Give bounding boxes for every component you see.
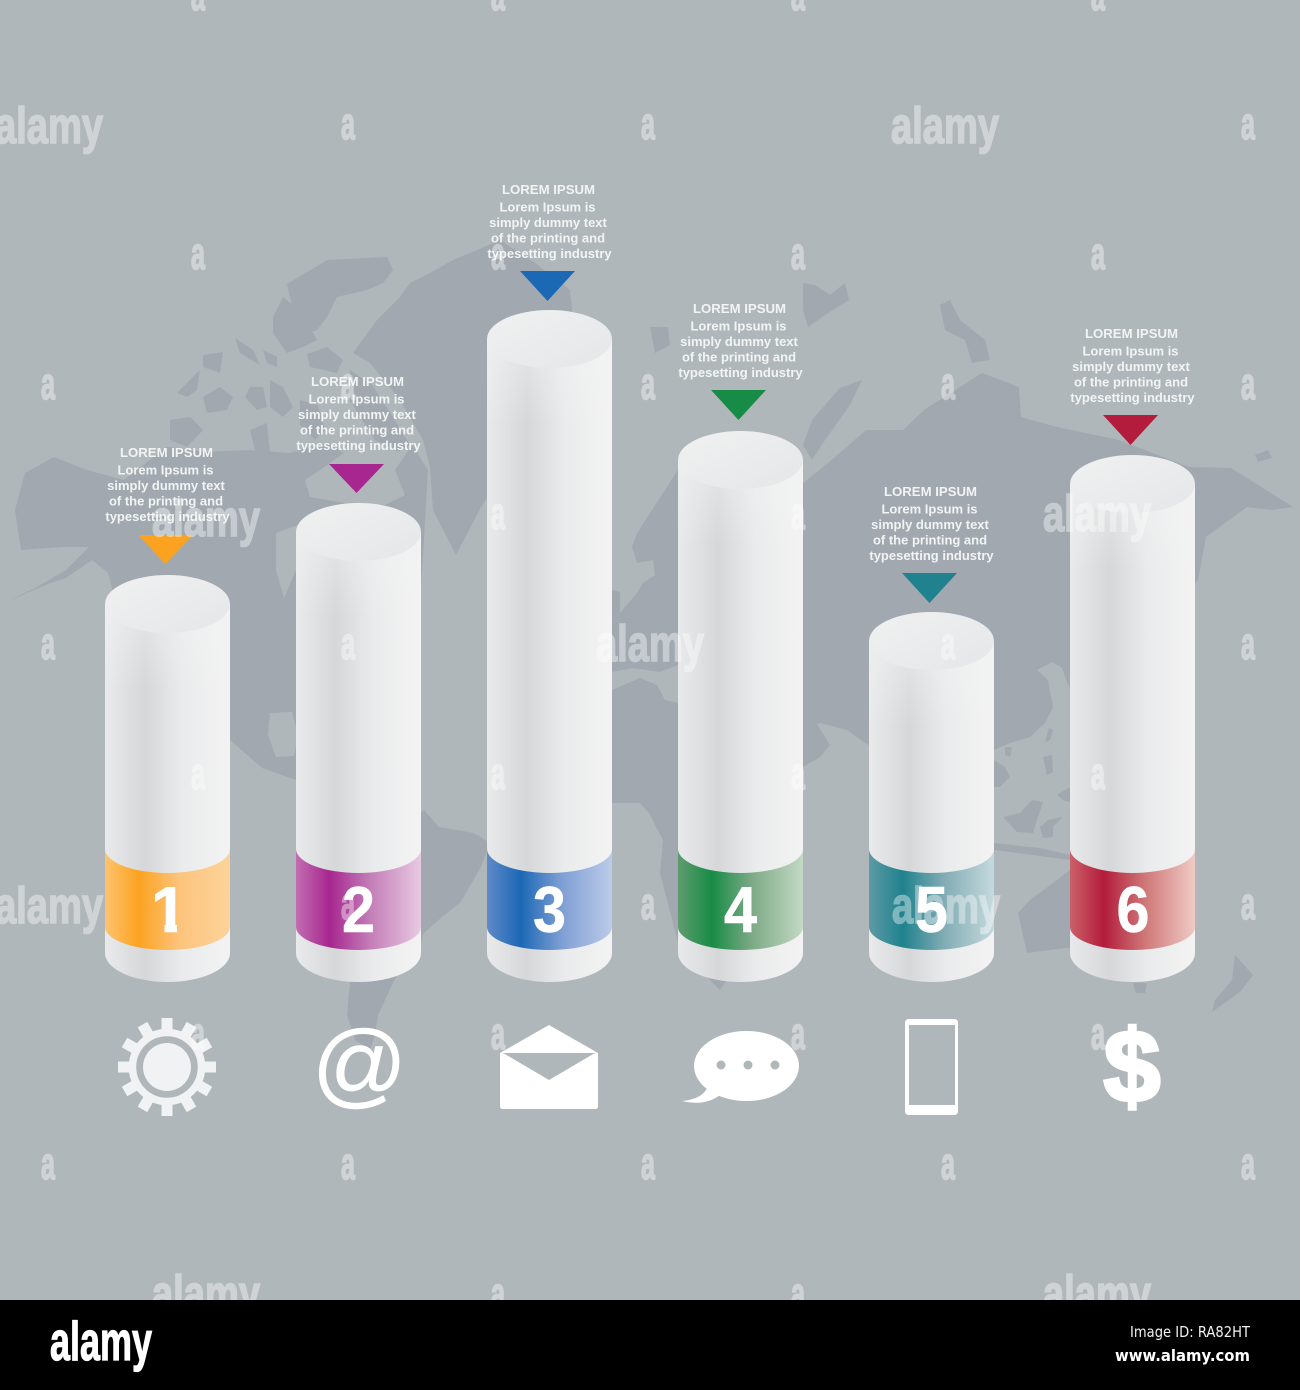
watermark pattern: a (341, 1138, 356, 1189)
watermark pattern: a (491, 488, 506, 539)
number 4: 4 (724, 873, 757, 946)
marker triangle 5 (902, 573, 957, 603)
text block 4: typesetting industry (678, 365, 803, 380)
text block 1 (105, 445, 230, 524)
watermark pattern: a (641, 98, 656, 149)
watermark pattern: a (1241, 878, 1256, 929)
watermark pattern: a (341, 878, 356, 929)
website: www.alamy.com (1115, 1346, 1250, 1365)
watermark pattern: a (641, 1138, 656, 1189)
text block 2: typesetting industry (296, 438, 421, 453)
icon: at sign: @ (310, 1011, 406, 1116)
watermark pattern: a (1091, 228, 1106, 279)
text block 1: simply dummy text (107, 478, 226, 493)
watermark pattern: a (191, 228, 206, 279)
text block 5: LOREM IPSUM (884, 484, 977, 499)
watermark pattern: a (641, 358, 656, 409)
watermark pattern: a (791, 1268, 806, 1319)
text block 5: simply dummy text (871, 517, 990, 532)
watermark pattern: a (791, 488, 806, 539)
text block 6: typesetting industry (1070, 390, 1195, 405)
watermark pattern: a (941, 1138, 956, 1189)
marker triangle 1 (138, 535, 193, 564)
text block 6: of the printing and (1074, 374, 1188, 390)
number 1: 1 (151, 873, 187, 946)
world map silhouette (6, 240, 1293, 1050)
icon: dollar sign: $ (1104, 1010, 1160, 1124)
watermark pattern: a (41, 358, 56, 409)
cylinder 2 colour band (296, 849, 421, 950)
watermark pattern: alamy (1043, 485, 1151, 542)
text block 2 (296, 374, 421, 453)
watermark pattern: alamy (152, 1265, 260, 1322)
cylinder 3 top (487, 310, 612, 368)
cylinder 6 top (1070, 455, 1195, 513)
text block 2: Lorem Ipsum is (308, 392, 405, 406)
text block 6: LOREM IPSUM (1085, 326, 1178, 341)
panel: cylinder 5 (869, 612, 994, 982)
cylinder 5 colour band (869, 849, 994, 950)
cylinder 3 colour band (487, 849, 612, 950)
text block 6: simply dummy text (1072, 359, 1191, 374)
text block 3: LOREM IPSUM (502, 182, 595, 197)
cylinder 2 top (296, 503, 421, 561)
text block 1: typesetting industry (105, 509, 230, 524)
marker triangle 3 (520, 271, 575, 301)
watermark pattern: a (191, 748, 206, 799)
watermark pattern: a (341, 98, 356, 149)
number 3: 3 (533, 873, 566, 946)
marker triangle 2 (329, 464, 384, 493)
text block 6: Lorem Ipsum is (1082, 344, 1179, 358)
watermark pattern: a (491, 1008, 506, 1059)
watermark pattern: a (341, 358, 356, 409)
text block 1: Lorem Ipsum is (117, 462, 214, 478)
text block 1: LOREM IPSUM (120, 445, 213, 460)
marker triangle 4 (711, 390, 766, 420)
panel: cylinder 6 (1070, 455, 1195, 982)
text block 1: of the printing and (109, 494, 223, 508)
watermark pattern: a (1091, 748, 1106, 799)
text block 4: of the printing and (682, 350, 796, 364)
cylinder 1 colour band (105, 849, 230, 950)
footer bar (0, 1300, 1300, 1390)
text block 5: typesetting industry (869, 548, 994, 563)
text block 3: typesetting industry (487, 246, 612, 261)
watermark pattern: alamy (1043, 1265, 1151, 1322)
cylinder 5 top (869, 612, 994, 670)
text block 4: Lorem Ipsum is (690, 318, 787, 334)
watermark pattern: alamy (596, 615, 704, 672)
panel: cylinder 3 (487, 310, 612, 982)
icon: gear (118, 1018, 216, 1116)
text block 3: Lorem Ipsum is (499, 200, 596, 214)
number 5: 5 (915, 873, 948, 946)
text block 2: LOREM IPSUM (311, 374, 404, 389)
text block 3: of the printing and (491, 230, 605, 246)
watermark pattern: a (941, 358, 956, 409)
watermark pattern: a (491, 748, 506, 799)
icon: smartphone (905, 1019, 958, 1115)
watermark pattern: alamy (152, 490, 260, 547)
panel: cylinder 2 (296, 503, 421, 982)
watermark pattern: a (1241, 358, 1256, 409)
cylinder 4 top (678, 431, 803, 489)
image id: Image ID: RA82HT (1130, 1323, 1251, 1341)
text block 5 (869, 484, 994, 563)
watermark pattern: a (641, 878, 656, 929)
marker triangle 6 (1103, 415, 1158, 445)
text block 4: simply dummy text (680, 334, 799, 349)
watermark pattern: a (941, 618, 956, 669)
text block 3 (487, 182, 612, 261)
footer logo: alamy (50, 1310, 152, 1372)
watermark pattern: a (341, 618, 356, 669)
text block 2: of the printing and (300, 422, 414, 438)
panel: cylinder 1 (105, 575, 230, 982)
number 6: 6 (1116, 873, 1150, 946)
watermark pattern: a (791, 228, 806, 279)
cylinder 6 colour band (1070, 849, 1195, 950)
panel: cylinder 4 (678, 431, 803, 982)
watermark pattern: a (1091, 1008, 1106, 1059)
watermark pattern: a (791, 1008, 806, 1059)
watermark pattern: a (491, 1268, 506, 1319)
icon: speech bubble (682, 1031, 799, 1103)
watermark pattern: a (1241, 1138, 1256, 1189)
watermark pattern: a (491, 228, 506, 279)
watermark pattern: a (41, 618, 56, 669)
text block 5: of the printing and (873, 532, 987, 548)
watermark pattern: a (41, 1138, 56, 1189)
text block 6 (1070, 326, 1195, 405)
number 2: 2 (342, 873, 375, 946)
text block 4 (678, 301, 803, 380)
watermark pattern: a (791, 748, 806, 799)
text block 3: simply dummy text (489, 215, 608, 230)
text block 5: Lorem Ipsum is (881, 502, 978, 516)
text block 2: simply dummy text (298, 407, 417, 422)
watermark pattern: alamy (891, 97, 999, 154)
watermark pattern: a (191, 1008, 206, 1059)
icon: envelope (500, 1025, 598, 1109)
watermark pattern: a (1241, 98, 1256, 149)
watermark pattern: alamy (892, 877, 1000, 934)
cylinder 1 top (105, 575, 230, 633)
text block 4: LOREM IPSUM (693, 301, 786, 316)
watermark pattern: a (1241, 618, 1256, 669)
cylinder 4 colour band (678, 849, 803, 950)
